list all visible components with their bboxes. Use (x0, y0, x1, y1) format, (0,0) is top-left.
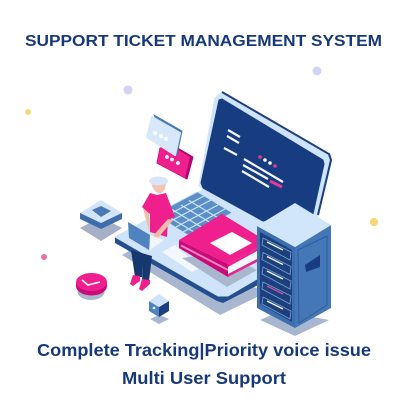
bottom text line 1: Complete Tracking|Priority voice issue (37, 340, 371, 360)
decorative dot: pink (41, 254, 47, 260)
shoes (130, 275, 150, 291)
screen dots (258, 155, 277, 168)
server top (257, 203, 331, 247)
router icon (80, 200, 122, 241)
left arm (143, 208, 150, 232)
small laptop (150, 235, 164, 250)
person (128, 176, 175, 291)
decorative dot: yellow left (25, 109, 31, 115)
badge with check mark (76, 273, 107, 300)
books (179, 214, 258, 287)
book shadow (182, 252, 257, 287)
laptop shadow (122, 247, 262, 315)
laptop screen frame (199, 92, 331, 222)
screen text lines (224, 130, 283, 187)
laptop screen (201, 99, 324, 221)
laptop screen edge (222, 92, 331, 215)
server shadow (260, 311, 329, 336)
slot lights (267, 242, 283, 309)
laptop base top (115, 186, 262, 296)
bottom text line 2: Multi User Support (122, 368, 286, 388)
screen pink bar (270, 181, 282, 187)
decorative dot: lavender left (124, 86, 132, 94)
shirt (142, 193, 175, 237)
book left side (179, 240, 228, 277)
title: SUPPORT TICKET MANAGEMENT SYSTEM (25, 33, 382, 50)
chat bubble: pink (157, 147, 193, 179)
book label (210, 232, 252, 255)
right arm (152, 219, 173, 238)
book cover (179, 214, 258, 264)
trackpad (162, 245, 200, 272)
keyboard (155, 192, 232, 236)
book pages (228, 248, 257, 277)
server slots (262, 238, 291, 319)
server rack (257, 203, 331, 336)
side badge (305, 255, 320, 272)
laptop base side (115, 237, 262, 303)
laptop (115, 92, 331, 315)
decorative dot: lavender right (312, 66, 322, 76)
small cube (149, 294, 169, 324)
hair (149, 176, 168, 186)
decorative dot: yellow right (370, 218, 378, 226)
chat bubble: light blue (147, 115, 182, 155)
legs (131, 250, 152, 281)
server front (257, 226, 295, 328)
head (151, 182, 166, 193)
server side (295, 225, 331, 328)
